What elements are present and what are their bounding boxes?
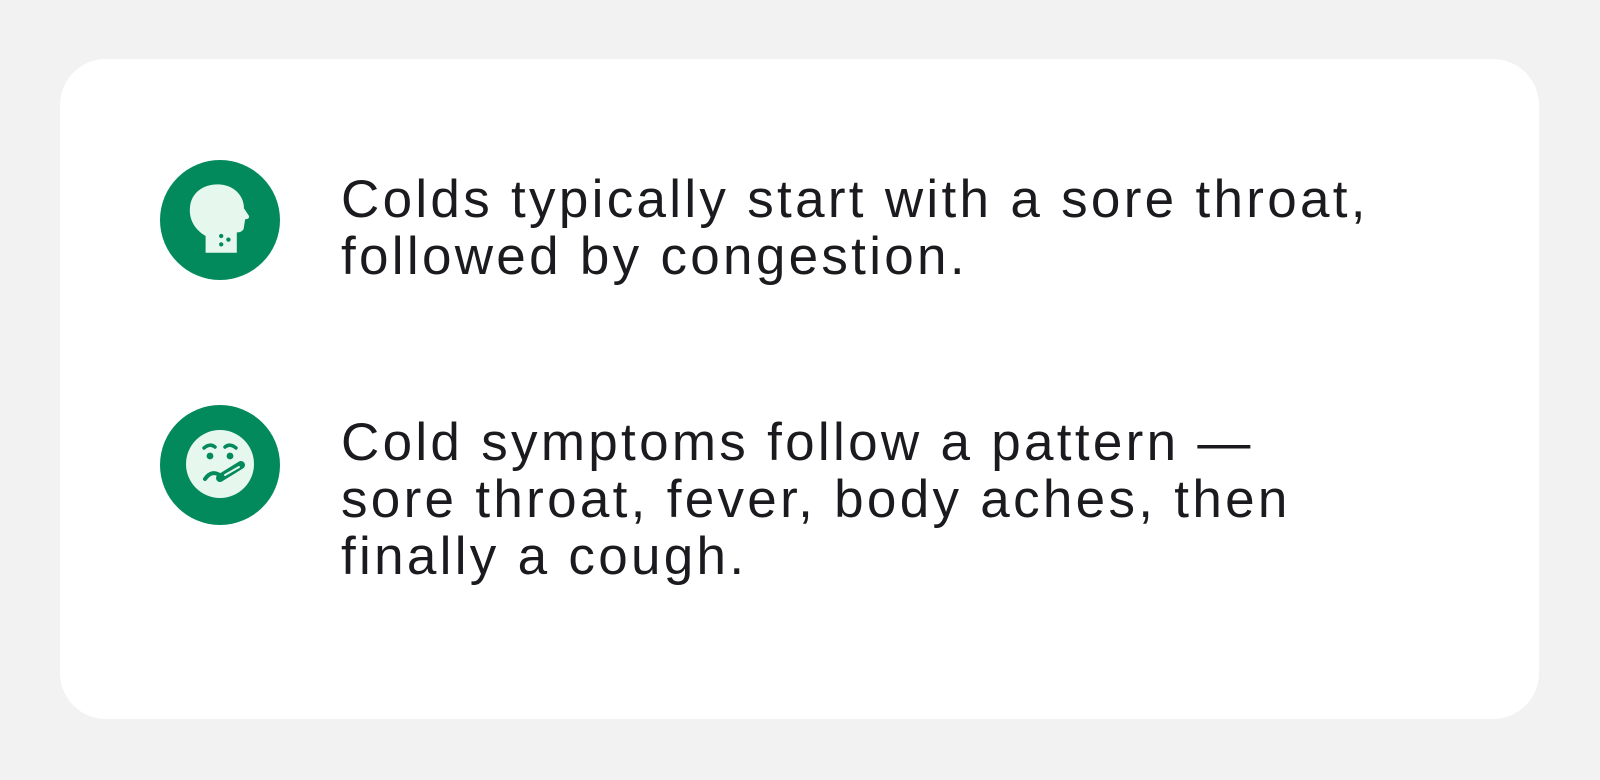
- icon: sore throat head: [160, 160, 280, 280]
- text: colds start with sore throat: followed by congestion.: [341, 227, 968, 286]
- icon: sick face with thermometer: [160, 405, 280, 525]
- text: cold symptom pattern: finally a cough.: [341, 527, 747, 586]
- text: colds start with sore throat: [341, 170, 1369, 286]
- card panel: [60, 59, 1539, 719]
- text: cold symptom pattern: sore throat, fever, body aches, then: [341, 470, 1291, 529]
- text: cold symptom pattern: Cold symptoms follow a pattern —: [341, 413, 1254, 472]
- text: cold symptom pattern: [341, 413, 1291, 586]
- text: colds start with sore throat: Colds typically start with a sore throat,: [341, 170, 1369, 229]
